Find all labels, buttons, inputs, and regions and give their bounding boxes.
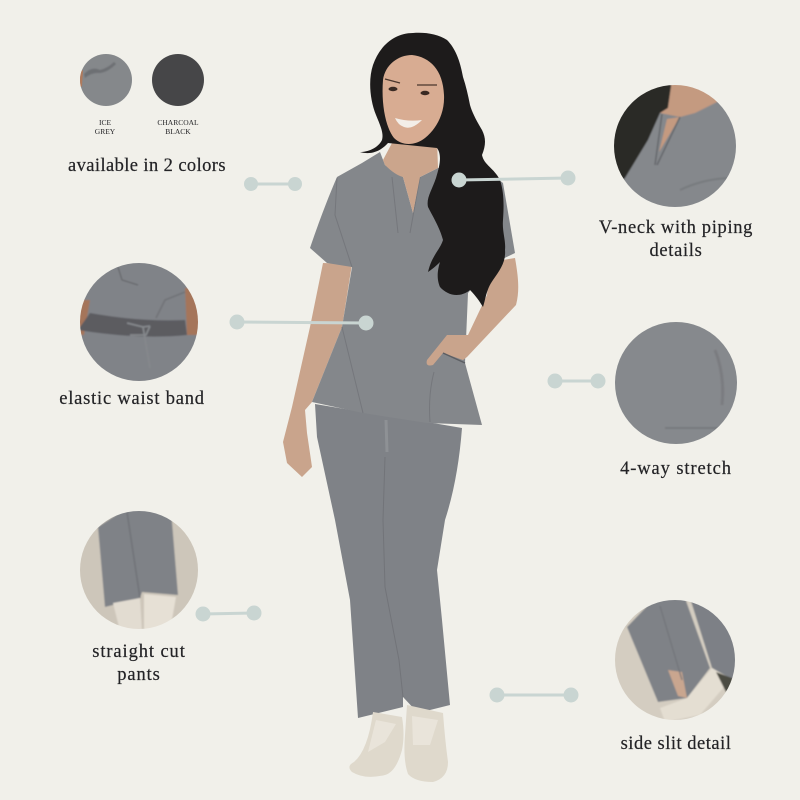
label: ice grey: ICE bbox=[99, 118, 111, 127]
detail photo: V-neck bbox=[614, 85, 736, 207]
caption: straight cut pants: straight cut bbox=[92, 642, 186, 662]
swatch: ice grey bbox=[80, 54, 132, 106]
detail photo: 4-way stretch bbox=[615, 322, 737, 444]
connector: V-neck bbox=[452, 170, 576, 188]
caption: 4-way stretch: 4-way stretch bbox=[620, 459, 732, 479]
top bbox=[310, 152, 515, 425]
arm: right bbox=[427, 258, 518, 365]
heading: available in 2 colors: available in 2 colors bbox=[68, 156, 226, 176]
arm: left bbox=[283, 263, 352, 477]
connector: waist bbox=[230, 314, 374, 330]
caption: side slit detail: side slit detail bbox=[621, 734, 731, 754]
shoes bbox=[349, 705, 448, 782]
detail photo: elastic waist band bbox=[78, 261, 200, 383]
facial features bbox=[385, 79, 437, 128]
connector: stretch bbox=[548, 374, 606, 388]
pants bbox=[315, 404, 462, 718]
label: charcoal black: CHARCOAL bbox=[157, 118, 199, 127]
detail photo: side slit detail bbox=[613, 598, 740, 722]
label: charcoal black: BLACK bbox=[165, 127, 191, 136]
connector: colors bbox=[244, 177, 302, 191]
label: ice grey: GREY bbox=[95, 127, 116, 136]
drawstring bbox=[386, 420, 387, 452]
swatch: charcoal black bbox=[152, 54, 204, 106]
caption: V-neck with piping details: details bbox=[650, 241, 702, 261]
caption: V-neck with piping details: V-neck with piping bbox=[599, 218, 753, 238]
neck bbox=[383, 140, 438, 213]
pocket edge bbox=[443, 353, 465, 363]
model figure bbox=[283, 33, 518, 782]
detail photo: straight cut pants bbox=[78, 508, 200, 631]
connector: side slit bbox=[490, 688, 578, 702]
hair bbox=[360, 33, 505, 307]
caption: straight cut pants: pants bbox=[117, 665, 161, 685]
sleeve seams and piping bbox=[335, 177, 434, 422]
face bbox=[383, 55, 444, 144]
connector: pants bbox=[196, 606, 262, 622]
caption: elastic waist band: elastic waist band bbox=[59, 389, 205, 409]
